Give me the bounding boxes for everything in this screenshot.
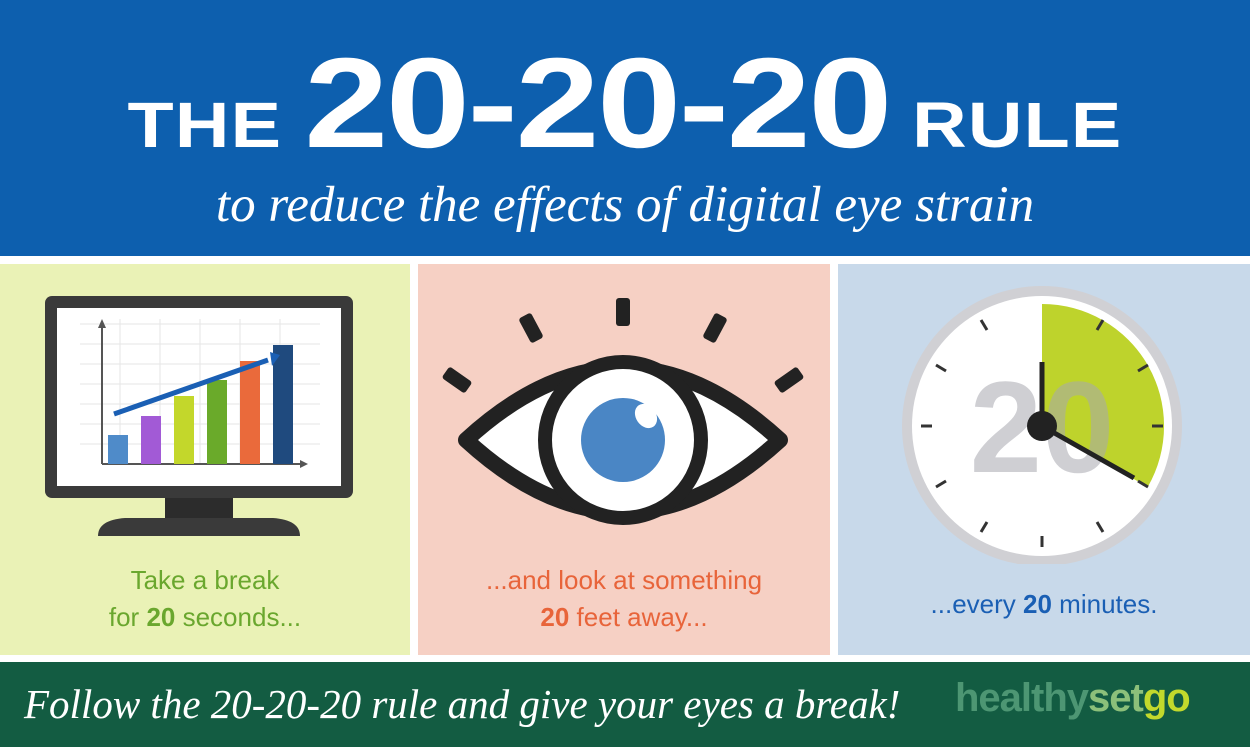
caption: take a break bbox=[109, 565, 301, 632]
panel: eye bbox=[418, 264, 830, 655]
caption: look far: 20 feet away... bbox=[540, 602, 708, 632]
icon: clock: 20 bbox=[970, 354, 1114, 500]
icon: clock bbox=[902, 286, 1182, 564]
panel: screen bbox=[0, 264, 410, 655]
caption: take a break: Take a break bbox=[131, 565, 279, 595]
subtitle: to reduce the effects of digital eye strain bbox=[216, 177, 1034, 233]
icon: eye bbox=[442, 298, 804, 525]
caption: look far: ...and look at something bbox=[486, 565, 762, 595]
caption: take a break: for 20 seconds... bbox=[109, 602, 301, 632]
header band bbox=[0, 0, 1250, 256]
footer tagline: Follow the 20-20-20 rule and give your eyes a break! bbox=[24, 681, 900, 727]
caption: every 20 minutes: ...every 20 minutes. bbox=[931, 589, 1157, 619]
logo: healthysetgo: healthysetgo bbox=[955, 676, 1190, 720]
panel: clock bbox=[838, 264, 1250, 655]
footer band bbox=[0, 662, 1250, 747]
caption: look far bbox=[486, 565, 762, 632]
icon: monitor with chart bbox=[45, 296, 353, 536]
title: THE 20-20-20 RULE bbox=[128, 32, 1122, 175]
